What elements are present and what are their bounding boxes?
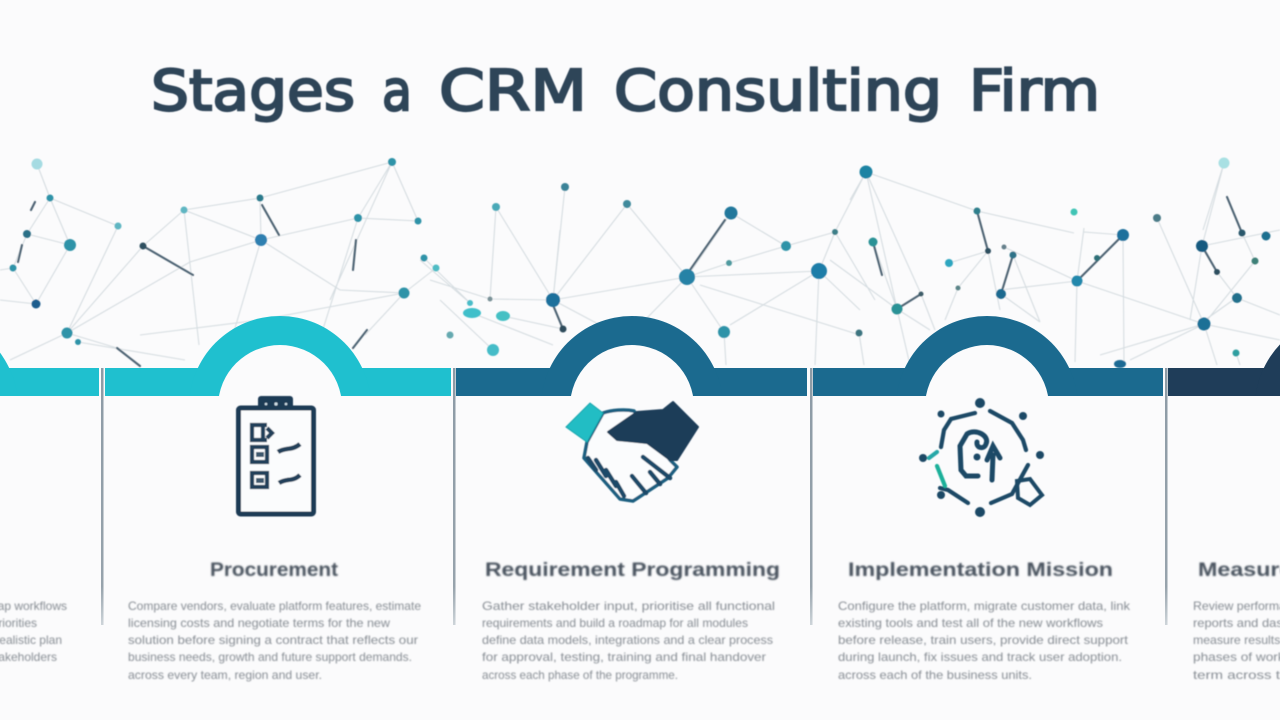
description: stage 3: for approval, testing, training and final handover (482, 650, 766, 664)
panel: stage 1 text (clipped) (0, 599, 67, 664)
panel: stage 4 text (838, 560, 1131, 682)
title: Consulting (614, 59, 942, 124)
description: stage 2 (128, 599, 421, 682)
panel: stage 2 text (128, 560, 421, 682)
description: stage 4: during launch, fix issues and track user adoption. (838, 650, 1122, 664)
description: stage 3 (482, 599, 775, 682)
icon: handshake (566, 402, 698, 501)
title: CRM (439, 59, 587, 124)
description: stage 3: Gather stakeholder input, prioritise all functional (482, 599, 775, 613)
title: Stages (151, 59, 355, 124)
description: stage 2: licensing costs and negotiate terms for the new (128, 616, 390, 630)
description: stage 4: existing tools and test all of the new workflows (838, 616, 1103, 630)
description: stage 4 (838, 599, 1131, 682)
heading: stage 4: Implementation Mission (848, 560, 1113, 581)
title: a (382, 59, 412, 124)
description: stage 2: across every team, region and user. (128, 668, 322, 682)
band segment 2 with arch (456, 316, 807, 396)
icon: clipboard checklist (238, 396, 314, 514)
description: stage 5 (1193, 599, 1280, 682)
timeline band (0, 316, 1280, 396)
column dividers (101, 368, 1168, 625)
band segment 1 with arches (0, 316, 451, 396)
description: stage 4: across each of the business units. (838, 668, 1032, 682)
description: stage 2: Compare vendors, evaluate platform features, estimate (128, 599, 421, 613)
heading: stage 2: Procurement (210, 560, 339, 581)
icon: gear network (919, 398, 1044, 517)
description: stage 3: define data models, integrations and a clear process (482, 633, 773, 647)
description: stage 4: before release, train users, provide direct support (838, 633, 1129, 647)
description: stage 3: across each phase of the programme. (482, 668, 678, 682)
panel: stage 5 text (clipped) (1193, 560, 1280, 682)
panel: stage 3 text (482, 560, 780, 682)
band segment 4 with arch (1168, 344, 1280, 396)
title: Firm (969, 59, 1100, 124)
network graphic (0, 158, 1280, 368)
description: stage 3: requirements and build a roadmap for all modules (482, 616, 748, 630)
band segment 3 with arch (813, 316, 1163, 396)
description: stage 2: solution before signing a contract that reflects our (128, 633, 418, 647)
description: stage 2: business needs, growth and future support demands. (128, 650, 412, 664)
heading: stage 3: Requirement Programming (485, 560, 780, 581)
description: stage 4: Configure the platform, migrate customer data, link (838, 599, 1131, 613)
